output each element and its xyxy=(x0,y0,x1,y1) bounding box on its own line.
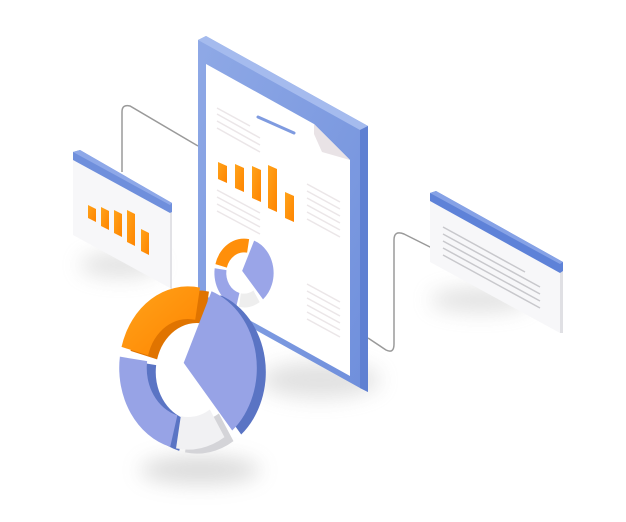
connector: left xyxy=(122,106,198,172)
frame xyxy=(198,36,368,392)
doc bar chart xyxy=(218,162,294,222)
folded corner xyxy=(314,124,350,160)
shadows xyxy=(80,253,530,484)
doc text lines xyxy=(217,108,340,337)
left card bars xyxy=(88,205,149,255)
doc header bar xyxy=(258,117,294,133)
big pie chart xyxy=(119,286,266,454)
right card lines xyxy=(443,227,540,308)
pie depth xyxy=(128,290,266,454)
left card header xyxy=(73,150,172,213)
left card xyxy=(73,150,172,290)
right card header xyxy=(430,191,563,273)
right card xyxy=(430,191,563,333)
doc pie xyxy=(214,239,274,307)
paper xyxy=(206,64,350,376)
connector: right xyxy=(368,233,432,351)
main document xyxy=(198,36,368,392)
pie faces xyxy=(119,286,257,450)
